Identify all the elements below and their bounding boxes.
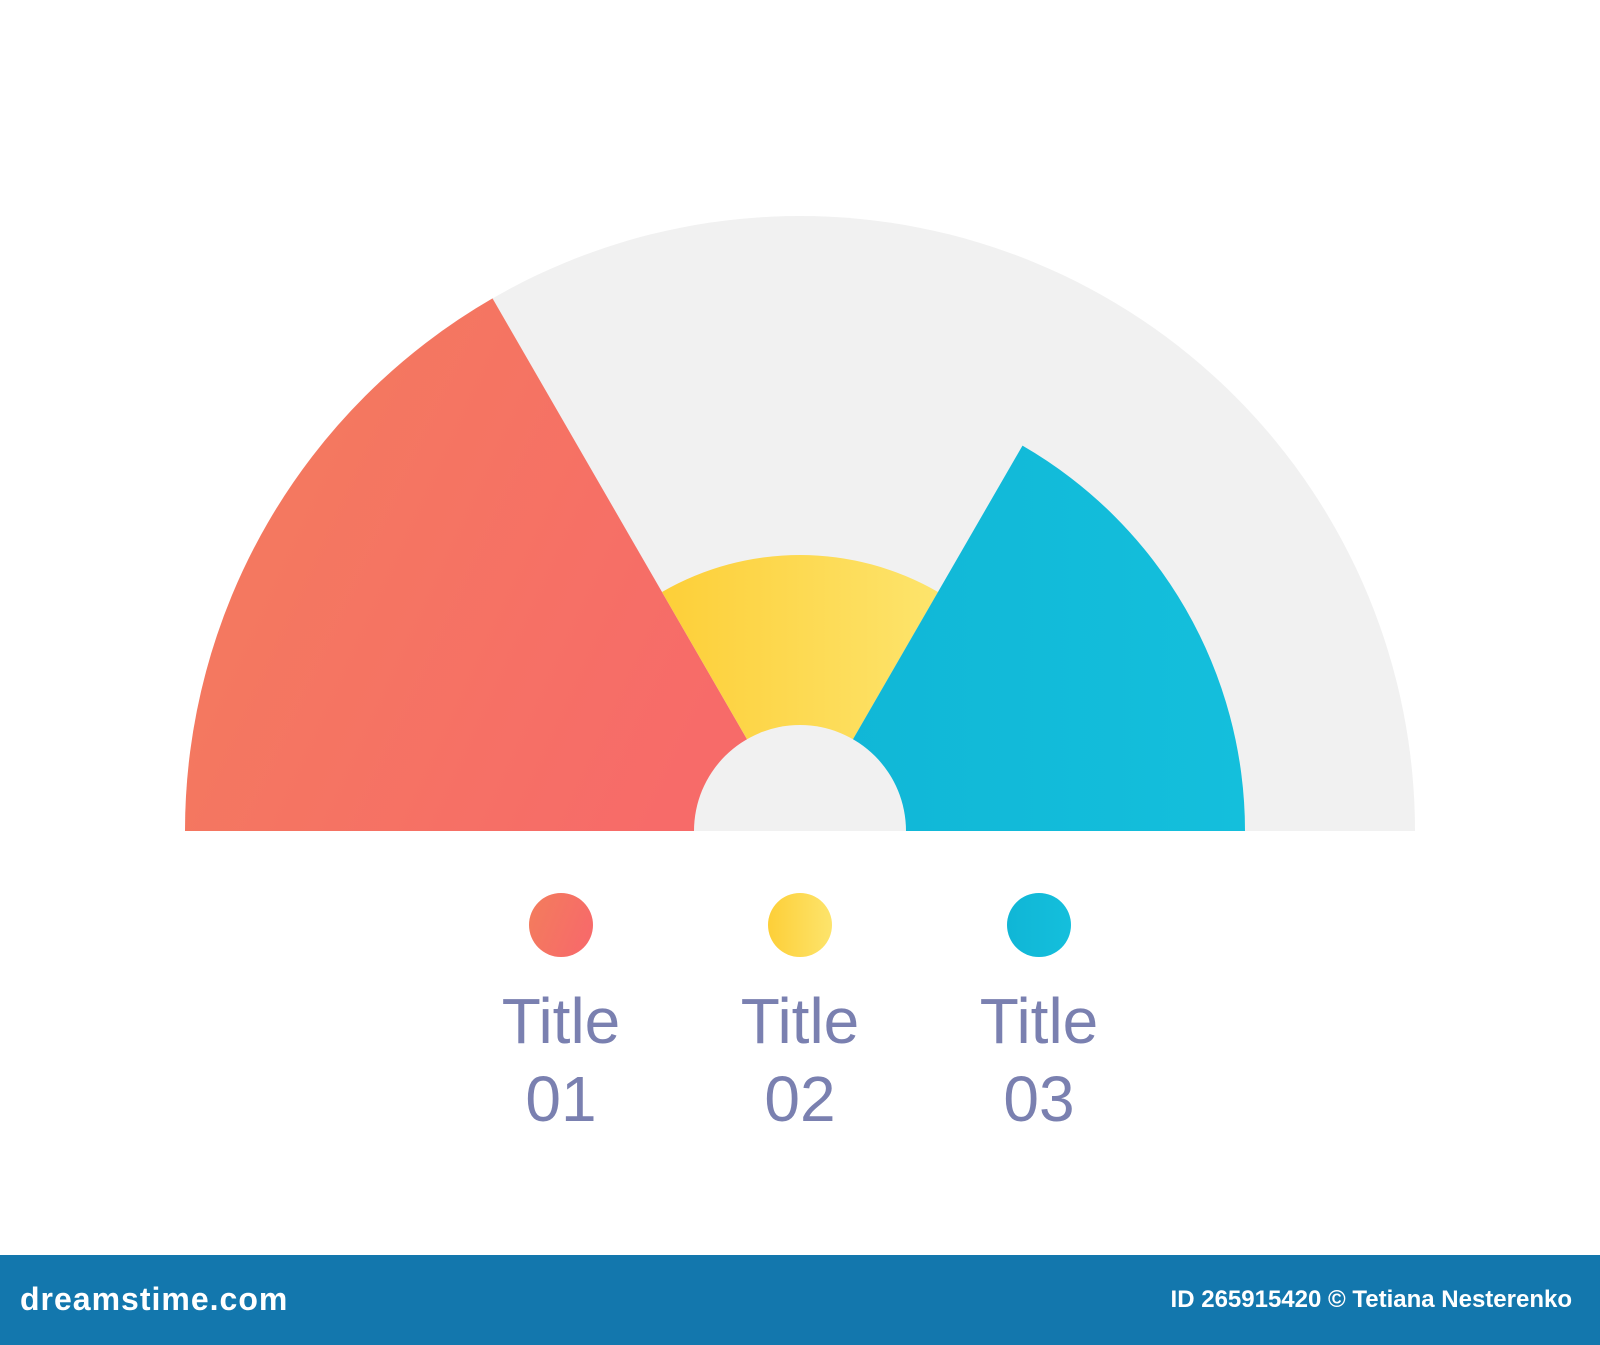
segment: red title 01 bbox=[185, 298, 800, 831]
legend dot red bbox=[529, 893, 593, 957]
label: Title 02: Title bbox=[741, 985, 859, 1057]
background gray arc bbox=[185, 216, 1415, 831]
label: Title 01: 01 bbox=[525, 1063, 597, 1135]
label: Title 02 bbox=[741, 985, 859, 1135]
label: Title 01: Title bbox=[502, 985, 620, 1057]
label: Title 02: 02 bbox=[764, 1063, 836, 1135]
label: Title 03 bbox=[980, 985, 1098, 1135]
footer bar bbox=[0, 1255, 1600, 1345]
label: Title 03: 03 bbox=[1003, 1063, 1075, 1135]
center hole bbox=[694, 725, 906, 831]
segment: yellow title 02 bbox=[662, 555, 938, 831]
footer credit: ID 265915420 © Tetiana Nesterenko bbox=[1171, 1286, 1572, 1313]
legend dot blue bbox=[1007, 893, 1071, 957]
legend dot yellow bbox=[768, 893, 832, 957]
footer logo text: dreamstime.com bbox=[20, 1281, 288, 1317]
label: Title 03: Title bbox=[980, 985, 1098, 1057]
segment: blue title 03 bbox=[800, 446, 1245, 831]
label: Title 01 bbox=[502, 985, 620, 1135]
